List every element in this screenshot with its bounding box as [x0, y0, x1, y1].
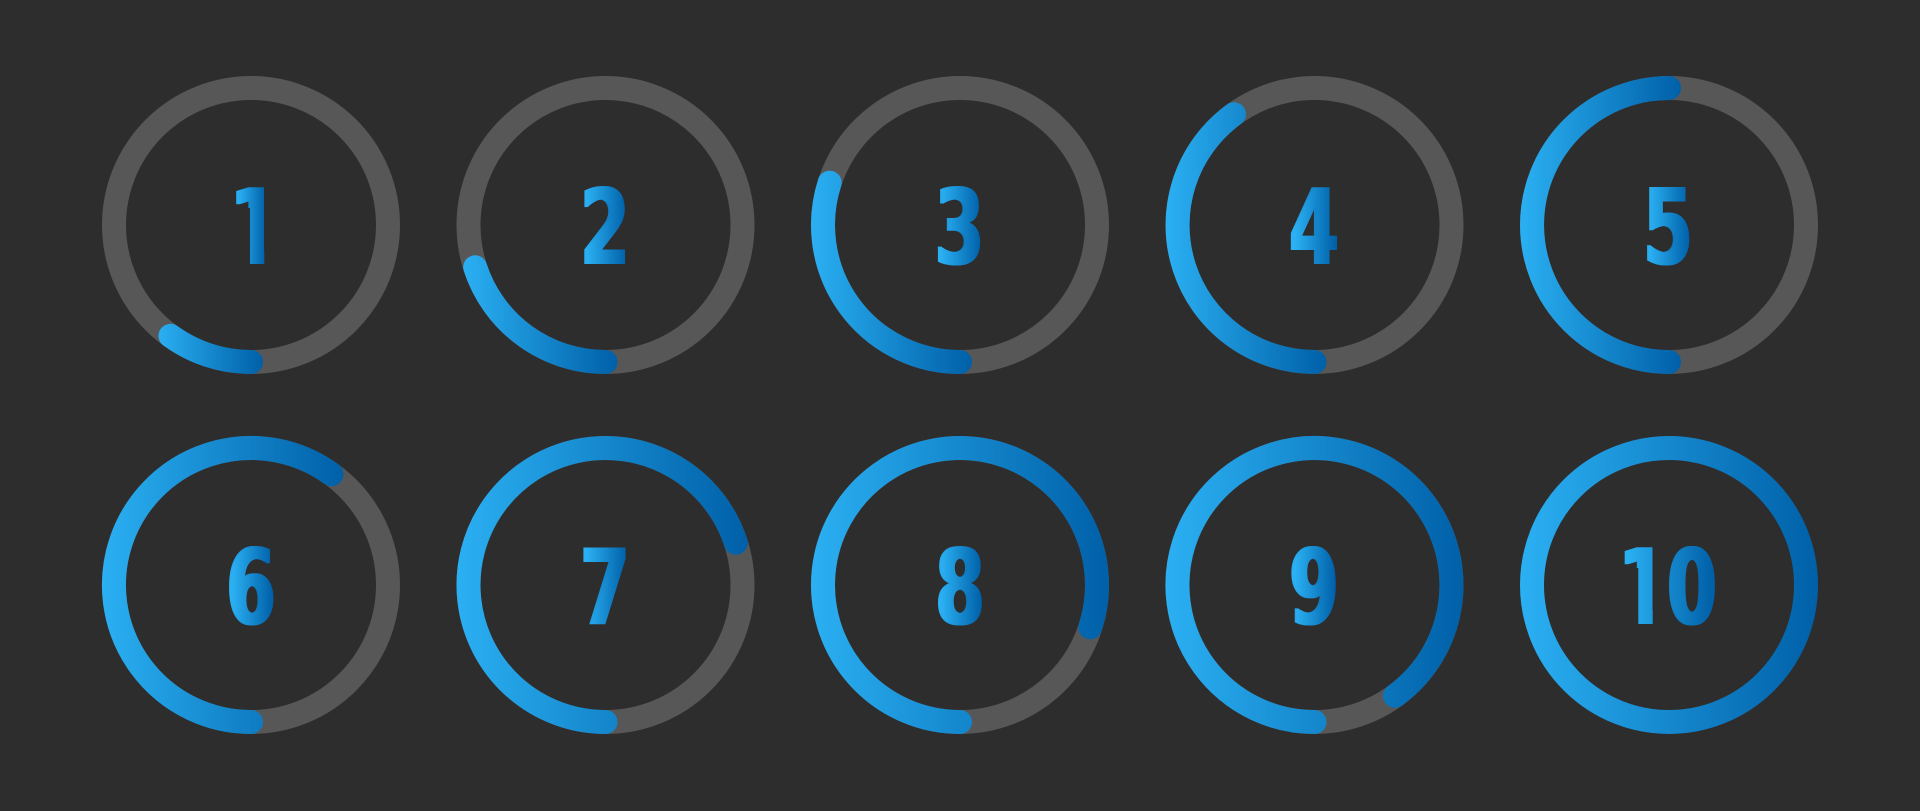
number 5: 5: [1643, 168, 1693, 290]
number 4: 4: [1289, 168, 1339, 290]
number 9: 9: [1289, 528, 1339, 650]
progress arc 8: [823, 448, 1097, 722]
gauge 10: [1532, 448, 1806, 722]
number 10: 10: [1618, 528, 1717, 650]
progress arc 2: [475, 267, 606, 362]
progress arc 3: [823, 183, 960, 362]
track ring 1: [114, 88, 388, 362]
progress arc 7: [468, 448, 736, 722]
gauge 8: [823, 448, 1097, 722]
full progress ring 10: [1532, 448, 1806, 722]
track ring 6: [114, 448, 388, 722]
gauge 7: [468, 448, 742, 722]
gauge 3: [823, 88, 1097, 362]
track ring 3: [823, 88, 1097, 362]
number 7: 7: [580, 528, 630, 650]
number 8: 8: [935, 528, 985, 650]
gauge 2: [468, 88, 742, 362]
track ring 7: [468, 448, 742, 722]
number 3: 3: [935, 168, 984, 290]
gauge 1: [114, 88, 388, 362]
track ring 5: [1532, 88, 1806, 362]
gauge 4: [1178, 88, 1452, 362]
track ring 8: [823, 448, 1097, 722]
track ring 2: [468, 88, 742, 362]
progress arc 9: [1177, 448, 1451, 722]
gauge 5: [1532, 88, 1806, 362]
track ring 4: [1178, 88, 1452, 362]
progress arc 6: [114, 448, 332, 722]
number 6: 6: [226, 528, 276, 650]
number 1: 1: [230, 168, 279, 290]
gauge 9: [1177, 448, 1452, 722]
track ring 9: [1178, 448, 1452, 722]
number 2: 2: [580, 168, 630, 290]
progress arc 1: [170, 336, 251, 362]
progress arc 4: [1178, 114, 1314, 362]
progress arc 5: [1532, 88, 1669, 362]
gauge 6: [114, 448, 388, 722]
